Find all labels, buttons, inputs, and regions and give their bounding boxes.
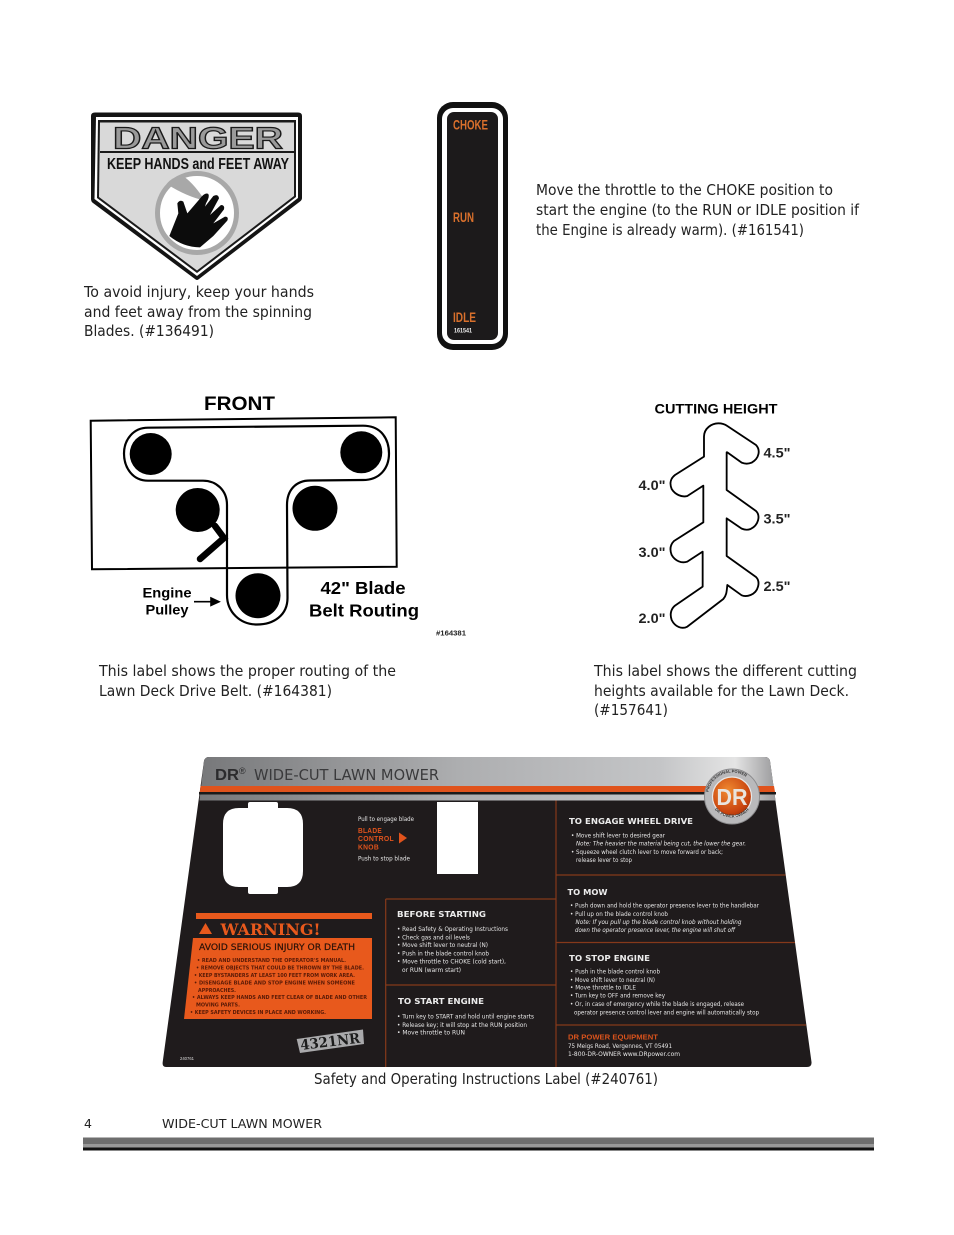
- throttle caption: the Engine is already warm). (#161541): [536, 221, 804, 239]
- icon: warning triangle: [199, 923, 212, 934]
- cutting height caption: [593, 662, 857, 719]
- danger caption: and feet away from the spinning: [84, 303, 312, 321]
- warning panel: [184, 913, 372, 1019]
- company address: 75 Meigs Road, Vergennes, VT 05491: [568, 1043, 672, 1050]
- company address: 1-800-DR-OWNER www.DRpower.com: [568, 1051, 680, 1058]
- page footer: 4: [84, 1116, 92, 1131]
- height labels: 4.0": [638, 477, 666, 493]
- to mow text: TO MOW: [568, 888, 608, 897]
- header title: WIDE-CUT LAWN MOWER: [254, 766, 439, 784]
- danger caption: [83, 283, 314, 340]
- blade control text: CONTROL: [358, 836, 394, 843]
- to engage wheel drive text: • Move shift lever to desired gear: [571, 832, 665, 840]
- to stop engine text: • Or, in case of emergency while the blade is engaged, release: [570, 1001, 744, 1008]
- to stop engine text: operator presence control lever and engine will automatically stop: [574, 1010, 759, 1016]
- page footer: WIDE-CUT LAWN MOWER: [162, 1116, 322, 1131]
- height labels: 3.5": [764, 510, 790, 526]
- to mow text: down the operator presence lever, the engine will shut off: [575, 927, 736, 934]
- to engage wheel drive text: release lever to stop: [576, 857, 632, 864]
- icon: DR logo badge: DR POWER OWNER: [715, 808, 749, 818]
- height labels: 3.0": [638, 544, 666, 560]
- arrow: engine pulley: [194, 598, 219, 605]
- belt routing title: Belt Routing: [309, 600, 419, 620]
- icon: blade and hand: [158, 174, 236, 252]
- warning panel: AVOID SERIOUS INJURY OR DEATH: [199, 943, 355, 953]
- danger heading: DANGER: [113, 120, 283, 156]
- engine pulley label: Engine: [142, 584, 192, 600]
- before starting text: • Read Safety & Operating Instructions: [397, 926, 508, 933]
- before starting text: • Push in the blade control knob: [397, 950, 489, 958]
- cutting height caption: This label shows the different cutting: [593, 662, 857, 680]
- throttle caption: Move the throttle to the CHOKE position to: [536, 181, 833, 199]
- warning panel: WARNING!: [220, 920, 320, 939]
- belt caption: This label shows the proper routing of the: [98, 662, 396, 680]
- header title: DR: [215, 767, 239, 784]
- height labels: 4.5": [764, 444, 790, 460]
- to start engine text: • Turn key to START and hold until engine starts: [397, 1014, 534, 1020]
- warning panel: APPROACHES.: [198, 988, 236, 994]
- cutting height caption: heights available for the Lawn Deck.: [594, 682, 849, 700]
- icon: DR logo badge: PROFESSIONAL POWER: [706, 770, 747, 792]
- company address: [568, 1034, 680, 1058]
- part number: #164381: [436, 630, 466, 638]
- header title: ®: [239, 766, 246, 776]
- throttle caption: [536, 181, 860, 239]
- danger caption: To avoid injury, keep your hands: [83, 283, 314, 301]
- to stop engine text: [569, 954, 759, 1016]
- to stop engine text: • Move throttle to IDLE: [570, 984, 636, 992]
- danger label: [91, 112, 302, 280]
- belt caption: Lawn Deck Drive Belt. (#164381): [99, 682, 332, 700]
- icon: DR logo badge: [704, 768, 760, 824]
- model badge: 4321NR: [300, 1031, 361, 1054]
- warning panel: • ALWAYS KEEP HANDS AND FEET CLEAR OF BLADE AND OTHER: [192, 995, 368, 1001]
- front heading: FRONT: [204, 394, 275, 415]
- before starting text: • Move throttle to CHOKE (cold start),: [397, 958, 506, 966]
- to engage wheel drive text: Note: The heavier the material being cut, the lower the gear.: [576, 840, 746, 848]
- warning panel: • REMOVE OBJECTS THAT COULD BE THROWN BY THE BLADE.: [196, 966, 364, 972]
- to mow text: Note: If you pull up the blade control knob without holding: [576, 919, 742, 926]
- blade control text: BLADE: [358, 828, 382, 835]
- to engage wheel drive text: [569, 817, 746, 864]
- to start engine text: [397, 997, 534, 1036]
- throttle label: 161541: [454, 328, 473, 334]
- belt routing title: 42" Blade: [320, 578, 406, 598]
- throttle caption: start the engine (to the RUN or IDLE position if: [536, 201, 860, 219]
- before starting text: • Move shift lever to neutral (N): [397, 942, 488, 949]
- panel caption: Safety and Operating Instructions Label (#240761): [314, 1070, 658, 1088]
- warning panel: • READ AND UNDERSTAND THE OPERATOR'S MANUAL.: [197, 958, 346, 964]
- to stop engine text: • Move shift lever to neutral (N): [570, 977, 655, 984]
- before starting text: or RUN (warm start): [402, 967, 461, 974]
- to stop engine text: • Turn key to OFF and remove key: [570, 992, 665, 1000]
- engine pulley label: [142, 584, 192, 618]
- throttle label: CHOKE: [453, 116, 488, 132]
- company address: DR POWER EQUIPMENT: [568, 1034, 659, 1042]
- throttle label: [437, 102, 508, 350]
- warning panel: • KEEP SAFETY DEVICES IN PLACE AND WORKING.: [190, 1010, 326, 1016]
- cutting height caption: (#157641): [594, 701, 668, 719]
- height slot outline: [670, 423, 759, 628]
- engine pulley label: Pulley: [146, 602, 189, 618]
- to start engine text: • Release key; it will stop at the RUN position: [397, 1022, 527, 1029]
- throttle cutout: [437, 802, 478, 874]
- belt routing title: [309, 578, 419, 620]
- part number: 240761: [180, 1056, 194, 1061]
- to start engine text: TO START ENGINE: [398, 997, 484, 1006]
- keep hands text: KEEP HANDS and FEET AWAY: [107, 156, 290, 173]
- danger caption: Blades. (#136491): [84, 322, 214, 340]
- warning panel: MOVING PARTS.: [196, 1002, 240, 1008]
- height labels: 2.5": [764, 578, 790, 594]
- height labels: 2.0": [638, 610, 666, 626]
- before starting text: BEFORE STARTING: [397, 910, 486, 919]
- to stop engine text: TO STOP ENGINE: [569, 954, 650, 963]
- icon: DR logo badge: DR: [716, 784, 748, 810]
- cutting height diagram: [638, 400, 790, 628]
- page footer: [83, 1116, 874, 1150]
- cutting height heading: CUTTING HEIGHT: [654, 400, 778, 416]
- ignition cutout: [223, 802, 303, 894]
- belt routing diagram: [91, 394, 466, 638]
- belt caption: [98, 662, 396, 700]
- section dividers: [386, 800, 806, 1067]
- height labels: [638, 444, 790, 626]
- before starting text: • Check gas and oil levels: [397, 934, 470, 942]
- throttle label: RUN: [453, 209, 474, 225]
- to engage wheel drive text: TO ENGAGE WHEEL DRIVE: [569, 817, 693, 826]
- to start engine text: • Move throttle to RUN: [397, 1030, 465, 1036]
- to mow text: • Pull up on the blade control knob: [570, 911, 668, 918]
- blade control text: [358, 816, 414, 862]
- before starting text: [397, 910, 508, 974]
- warning panel: • DISENGAGE BLADE AND STOP ENGINE WHEN SOMEONE: [194, 980, 355, 986]
- panel: safety and operating instructions label: [162, 757, 812, 1067]
- to mow text: • Push down and hold the operator presence lever to the handlebar: [570, 902, 759, 910]
- blade control text: KNOB: [358, 844, 379, 852]
- throttle label: IDLE: [453, 309, 476, 325]
- blade control text: Pull to engage blade: [358, 816, 414, 823]
- to mow text: [568, 888, 759, 934]
- warning panel: • KEEP BYSTANDERS AT LEAST 100 FEET FROM WORK AREA.: [194, 973, 355, 979]
- to engage wheel drive text: • Squeeze wheel clutch lever to move forward or back;: [571, 849, 723, 856]
- to stop engine text: • Push in the blade control knob: [570, 968, 660, 976]
- blade control text: Push to stop blade: [358, 856, 410, 862]
